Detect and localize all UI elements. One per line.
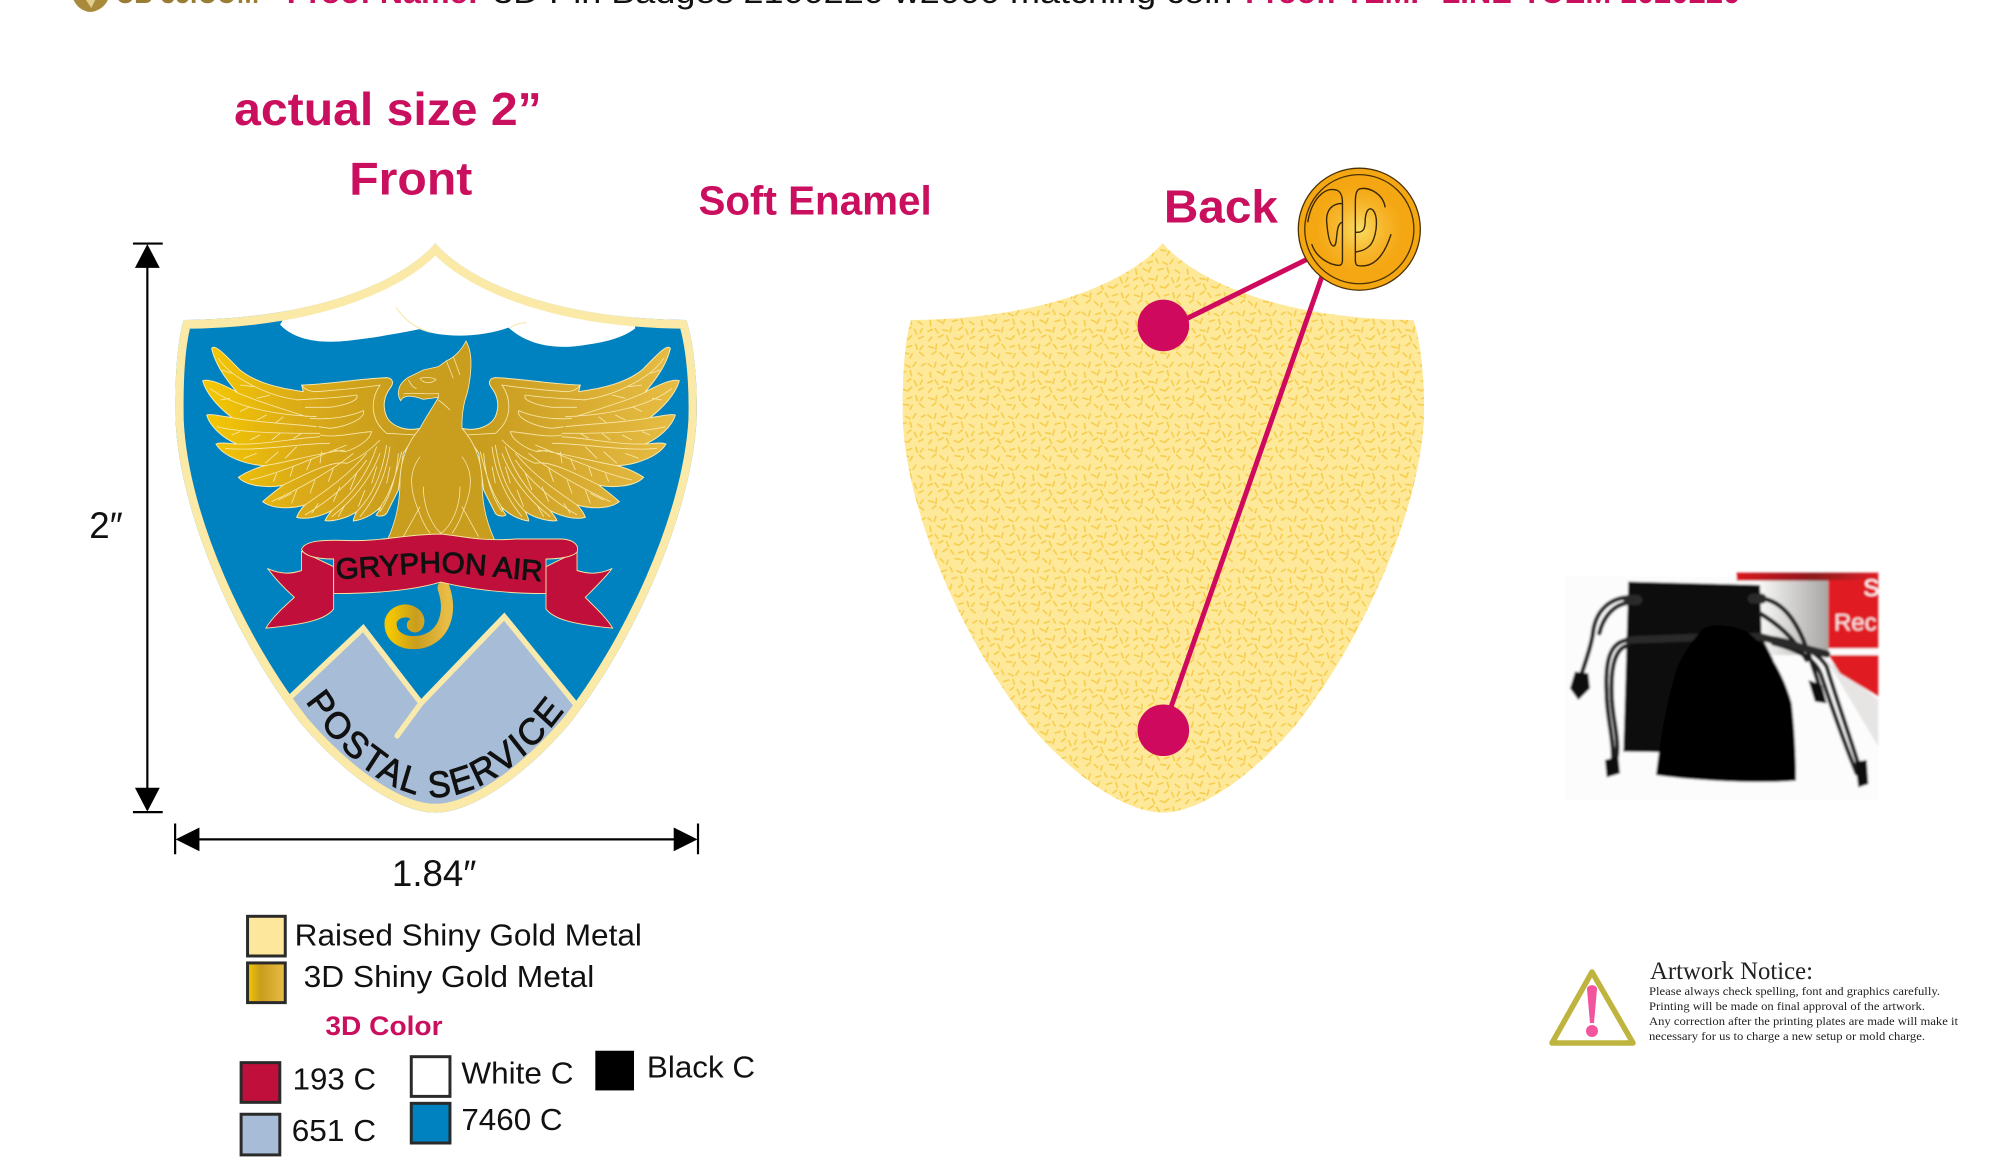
banner text: GRYPHON AIR (336, 552, 542, 582)
red banner behind pouch: Rec (1834, 610, 1877, 637)
legend: Black C (595, 1050, 755, 1090)
red banner behind pouch: S (1863, 575, 1879, 602)
notice body: Please always check spelling, font and graphics carefully. (1649, 985, 1940, 998)
height dimension arrow (133, 244, 163, 812)
gryphon tail curl (391, 588, 447, 643)
velvet pouch photo (1565, 573, 1879, 800)
legend: 7460 C: 7460 C (461, 1102, 563, 1137)
notice body: necessary for us to charge a new setup or mold charge. (1649, 1030, 1925, 1043)
notice body: Printing will be made on final approval of the artwork. (1649, 1000, 1925, 1013)
ribbon banner (266, 534, 613, 628)
pin attachment dot lower (1138, 704, 1189, 756)
pin attachment connector lines (1163, 258, 1324, 730)
red banner behind pouch (1737, 573, 1879, 747)
legend: 651 C: 651 C (292, 1113, 376, 1148)
legend: White C: White C (461, 1055, 573, 1090)
pouch drawstrings (1577, 597, 1863, 780)
legend: Black C: Black C (647, 1050, 755, 1085)
legend: 7460 C (411, 1102, 563, 1143)
notice body: Any correction after the printing plates are made will make it (1649, 1015, 1959, 1028)
notice body (1649, 985, 1959, 1043)
white cloud band (280, 243, 636, 347)
curved text postal service: POSTAL SERVICE (306, 688, 564, 798)
back badge (903, 243, 1424, 813)
icon: warning triangle (1552, 972, 1633, 1043)
legend (241, 916, 755, 1155)
legend: raised shiny gold: Raised Shiny Gold Metal (295, 918, 642, 953)
raised gold border (175, 243, 697, 813)
pouch knots (1570, 672, 1868, 787)
legend: 3D shiny gold: 3D Shiny Gold Metal (304, 959, 594, 994)
right wing (462, 347, 679, 521)
heading: front: Front (349, 152, 472, 204)
notice title: Artwork Notice: (1650, 958, 1813, 985)
width dimension arrow (175, 824, 698, 854)
left wing (203, 347, 420, 521)
heading: back: Back (1164, 180, 1278, 232)
legend: 193 C (241, 1061, 376, 1102)
mountains (284, 612, 582, 812)
photo backdrop (1565, 577, 1878, 800)
front badge (175, 243, 697, 813)
badge enamel field (175, 243, 697, 813)
pin attachment dot upper (1138, 300, 1189, 351)
legend: 3D shiny gold (248, 959, 594, 1003)
gryphon head and body (387, 341, 495, 542)
heading: actual size: actual size 2” (234, 83, 542, 135)
page header strip (cropped at top edge) (72, 0, 1740, 12)
width label: 1.84″ (392, 853, 476, 894)
back pouch (1623, 582, 1773, 753)
height label: 2″ (89, 505, 123, 546)
front pouch (1656, 625, 1796, 782)
legend: White C (411, 1055, 573, 1096)
logo mark (72, 0, 109, 12)
legend: 193 C: 193 C (293, 1061, 376, 1096)
artwork notice (1552, 958, 1959, 1043)
heading: soft enamel: Soft Enamel (699, 177, 932, 223)
military clutch coin icon (1298, 168, 1420, 290)
legend heading: 3D color: 3D Color (325, 1011, 443, 1041)
legend: 651 C (241, 1113, 376, 1155)
